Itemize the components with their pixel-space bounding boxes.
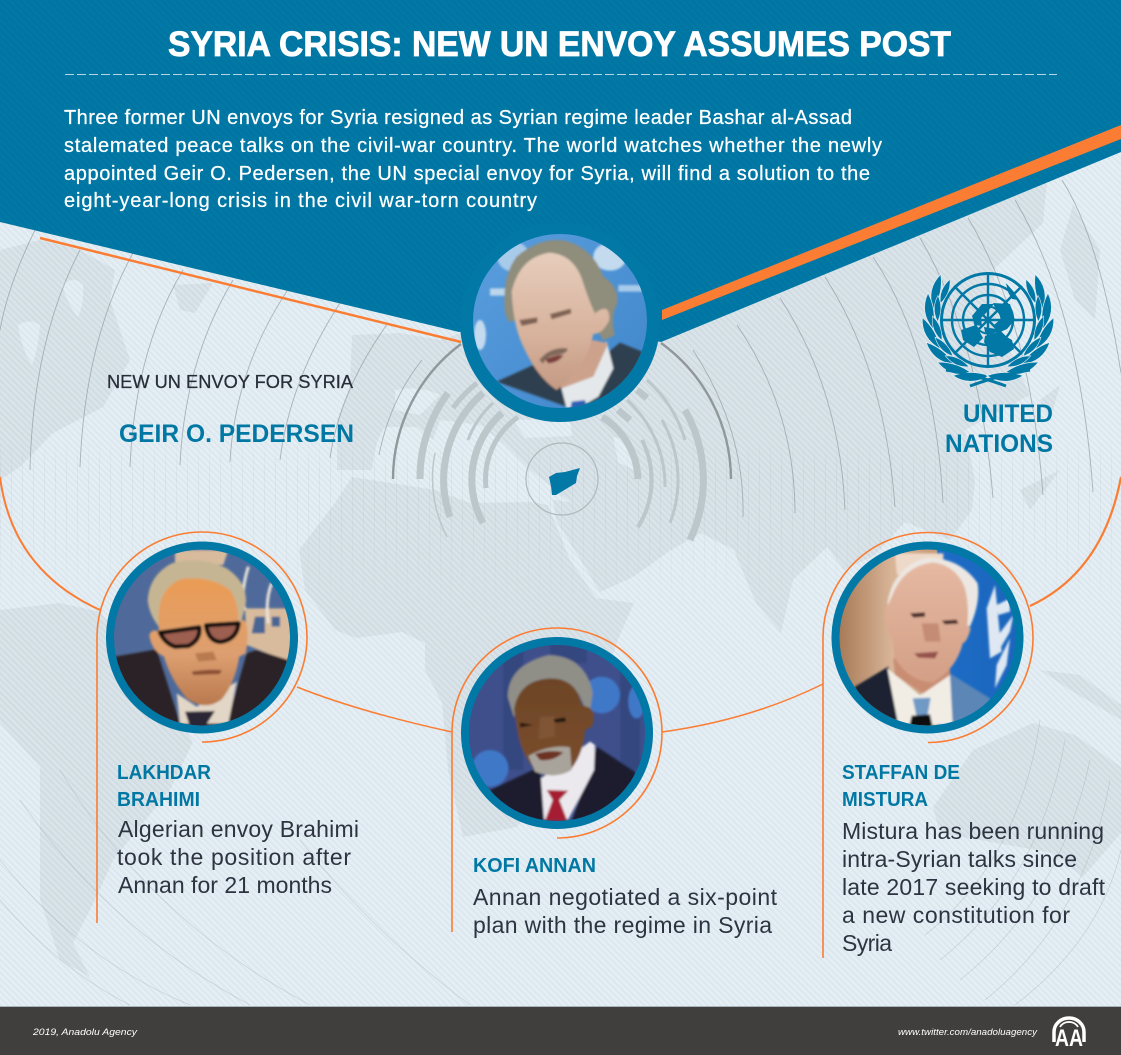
description: [117, 816, 359, 898]
panel: Kofi Annan: [452, 628, 778, 938]
neck: [893, 658, 950, 693]
description: Syria: [842, 930, 892, 956]
flag folds: [987, 585, 1013, 688]
shirt: [177, 682, 237, 724]
tie: [185, 711, 215, 727]
new envoy caption: GEIR O. PEDERSEN: [119, 420, 354, 448]
map: arabia: [553, 500, 671, 592]
twitter url: www.twitter.com/anadoluagency: [898, 1027, 1038, 1038]
face: [149, 578, 248, 705]
microphone: [909, 714, 933, 727]
nose shadow and mouth: [195, 652, 217, 662]
icon: Anadolu Agency logo: AA: [1055, 1025, 1083, 1052]
circle around Syria: [526, 443, 598, 515]
portrait: [832, 542, 1024, 734]
intro paragraph: [64, 107, 882, 212]
map: africa: [299, 477, 634, 837]
wreath left: [919, 273, 989, 384]
map: japan and pacific islands: [1020, 205, 1100, 510]
description: intra-Syrian talks since: [842, 846, 1077, 872]
suit: [116, 648, 288, 726]
icon: Anadolu Agency logo: [1054, 1018, 1084, 1052]
panel: Staffan de Mistura: [823, 532, 1106, 958]
footer bar: [0, 1006, 1121, 1055]
intro paragraph: stalemated peace talks on the civil-war country. The world watches whether the newly: [64, 135, 882, 157]
intro paragraph: eight-year-long crisis in the civil war-torn country: [64, 190, 537, 212]
beard: [528, 747, 572, 775]
orange ring: [452, 628, 662, 932]
icon: UN emblem: [919, 272, 1057, 386]
description: Algerian envoy Brahimi: [118, 816, 359, 842]
dashed rule: [65, 74, 1057, 76]
name: [117, 762, 212, 811]
portrait: [106, 542, 298, 734]
tie: [545, 790, 568, 821]
description: took the position after: [117, 844, 351, 870]
tie: [570, 398, 588, 408]
bottom corner contour lines: [0, 720, 1121, 1005]
name: [842, 762, 960, 811]
name: LAKHDAR: [117, 762, 212, 784]
intro paragraph: appointed Geir O. Pedersen, the UN special envoy for Syria, will find a solution to the: [64, 163, 870, 185]
orange stripe right: [662, 125, 1121, 320]
copyright: 2019, Anadolu Agency: [32, 1027, 138, 1038]
map: north america: [0, 240, 130, 480]
orange ring: [97, 532, 307, 923]
map: greenland: [173, 283, 213, 313]
description: plan with the regime in Syria: [473, 912, 772, 938]
orange connector lines: [0, 477, 1121, 732]
intro paragraph: Three former UN envoys for Syria resigned as Syrian regime leader Bashar al-Assad: [64, 107, 852, 129]
hair: [508, 655, 593, 717]
map: south america: [0, 603, 193, 977]
map: australia: [933, 670, 1121, 877]
face: [514, 678, 594, 775]
shirt: [887, 668, 953, 725]
description: [842, 818, 1106, 956]
shirt: [559, 342, 613, 408]
description: Annan for 21 months: [118, 872, 332, 898]
name: KOFI ANNAN: [473, 855, 596, 877]
title: SYRIA CRISIS: NEW UN ENVOY ASSUMES POST: [168, 25, 951, 64]
description: a new constitution for: [842, 902, 1070, 928]
suit: [497, 343, 647, 412]
map: mediterranean, black and caspian seas: [372, 388, 634, 503]
new envoy caption: [107, 372, 354, 448]
name: MISTURA: [842, 789, 928, 811]
radar arcs around Syria: [393, 343, 731, 540]
portrait: [461, 637, 653, 830]
meridian lines: [0, 180, 1121, 517]
suit: [853, 667, 900, 725]
orange ring: [823, 532, 1033, 958]
UN emblems in background: [583, 677, 620, 713]
neck: [560, 338, 609, 390]
United Nations label: UNITED: [963, 400, 1053, 428]
face: [512, 253, 609, 390]
name: BRAHIMI: [117, 789, 200, 811]
mouth: [535, 751, 563, 760]
name: STAFFAN DE: [842, 762, 960, 784]
map: eurasia: [337, 150, 1050, 633]
United Nations label: [945, 400, 1053, 458]
description: [473, 884, 778, 938]
icon: Syria map: [549, 468, 580, 495]
wreath right: [987, 273, 1057, 384]
tie: [913, 698, 931, 717]
description: late 2017 seeking to draft: [842, 874, 1106, 900]
face: [885, 562, 971, 682]
hair: [148, 560, 246, 630]
suit: [490, 746, 636, 821]
description: Mistura has been running: [842, 818, 1104, 844]
new envoy caption: NEW UN ENVOY FOR SYRIA: [107, 372, 353, 392]
hair: [504, 240, 618, 341]
orange line left of main portrait: [40, 238, 461, 342]
panel: Lakhdar Brahimi: [97, 532, 359, 923]
main portrait: Geir O. Pedersen: [460, 222, 660, 422]
description: Annan negotiated a six-point: [473, 884, 778, 910]
shirt: [541, 742, 595, 819]
United Nations label: NATIONS: [945, 430, 1053, 458]
top banner: [0, 0, 1121, 342]
glasses: [160, 623, 239, 647]
hair: [887, 558, 978, 627]
facial features: [519, 309, 571, 326]
